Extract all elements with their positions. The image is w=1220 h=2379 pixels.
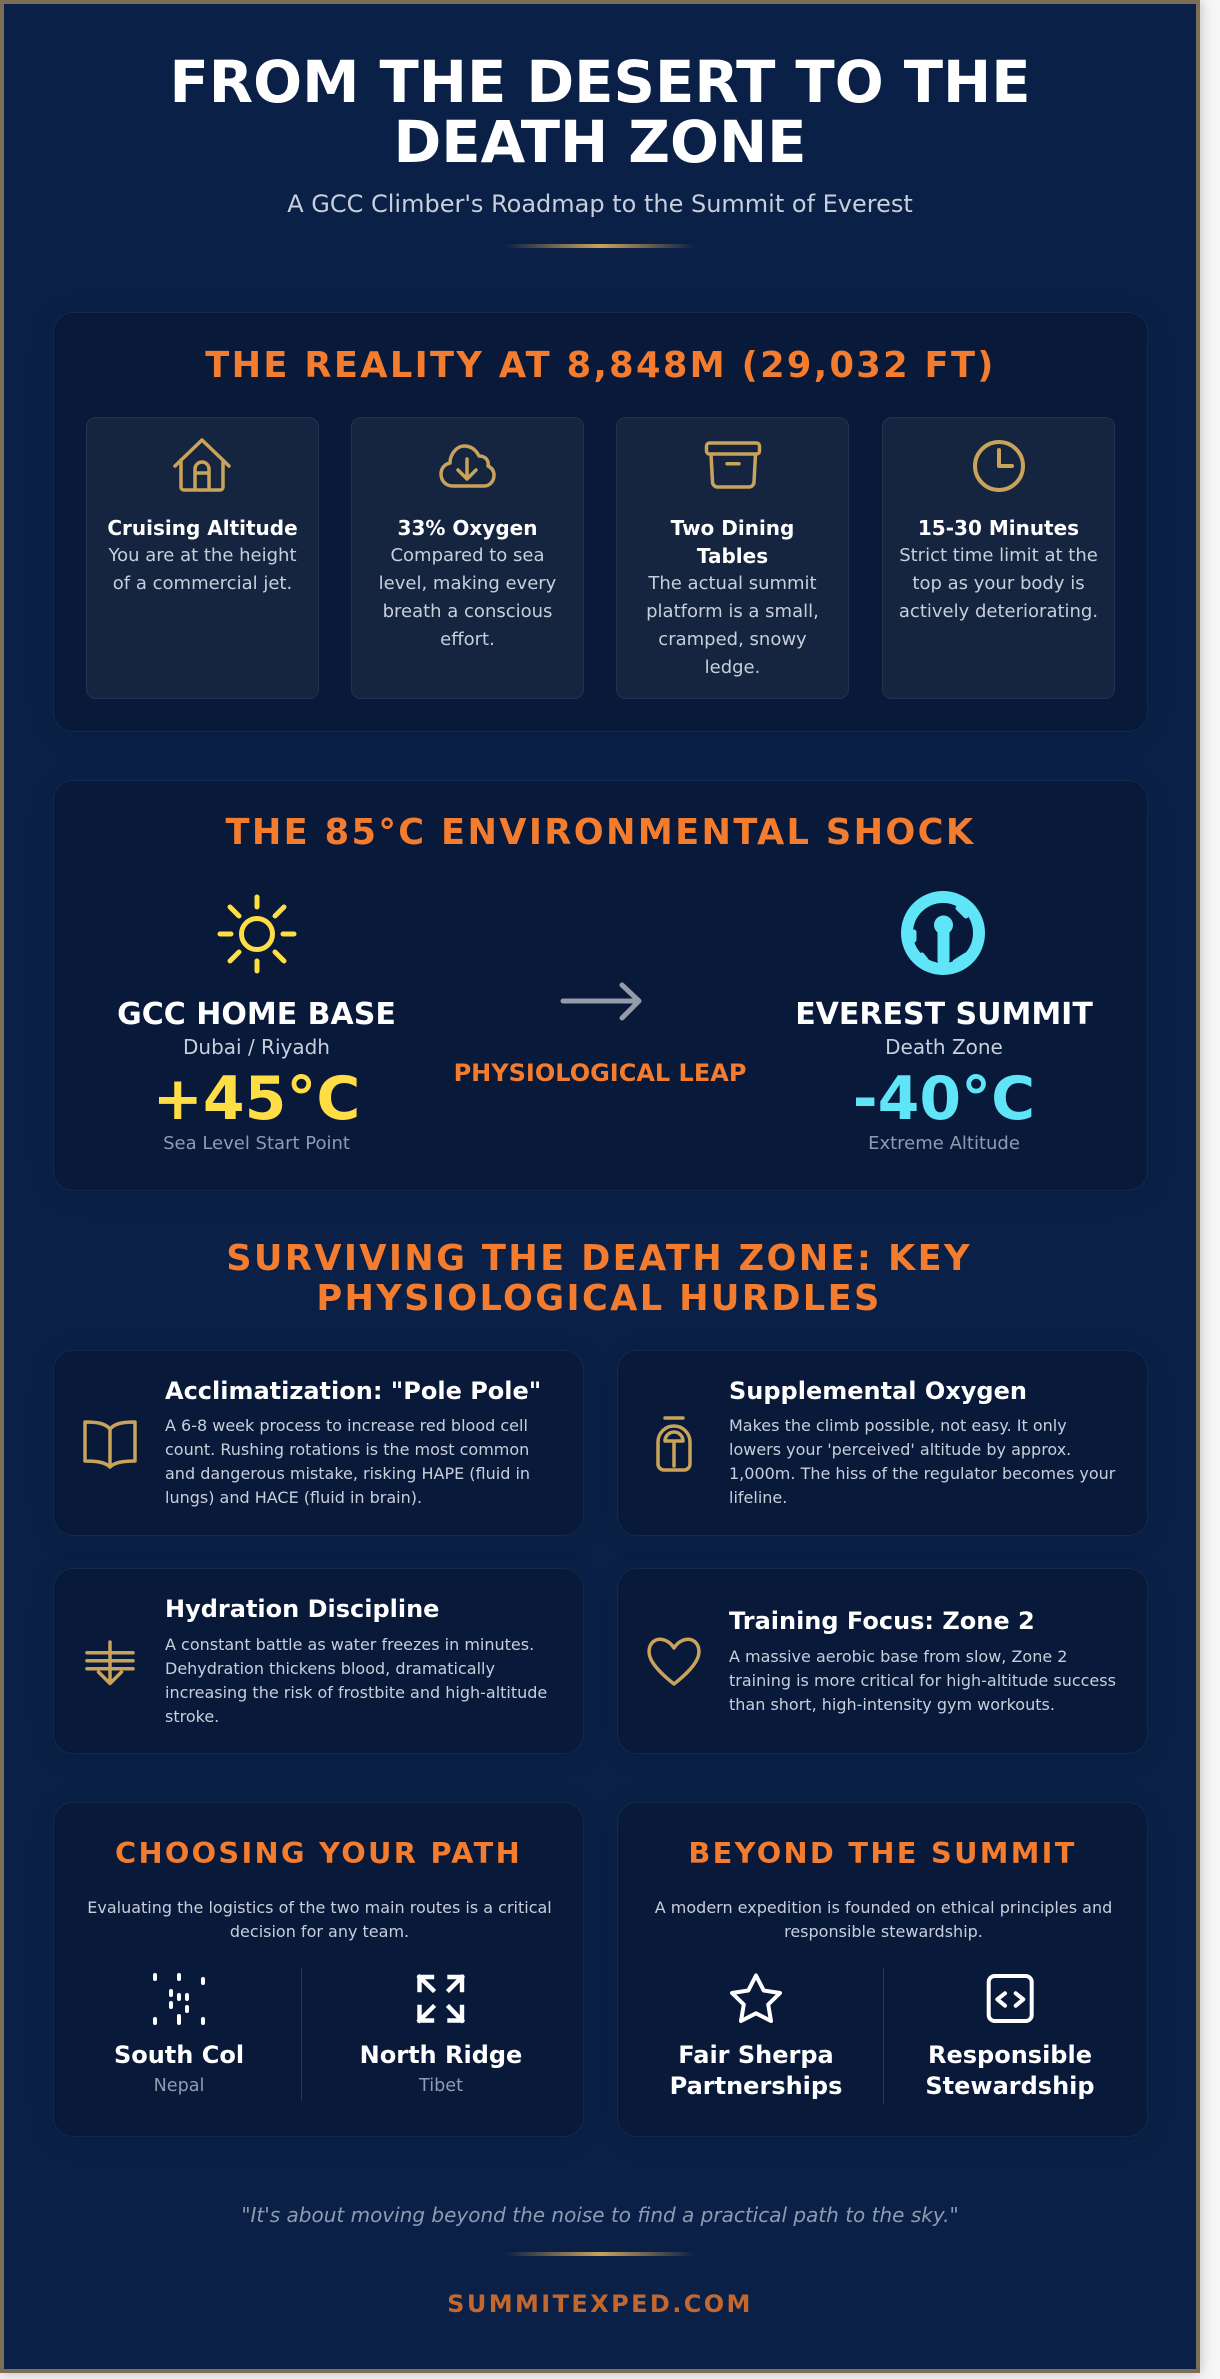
text: cruising altitude: of a commercial jet. xyxy=(113,573,292,594)
temperature: +45: +45°C xyxy=(153,1064,360,1134)
icon: house xyxy=(173,438,231,492)
title xyxy=(169,49,1031,176)
text: minutes: top as your body is xyxy=(912,573,1085,594)
label: GCC home base: GCC HOME BASE xyxy=(117,997,396,1032)
text: minutes: actively deteriorating. xyxy=(899,601,1098,622)
icon: cloud download xyxy=(439,444,496,488)
text: cruising altitude: You are at the height xyxy=(108,545,297,566)
intro: choosing your path: decision for any team. xyxy=(230,1922,409,1941)
card: supplemental oxygen xyxy=(617,1350,1148,1536)
text: oxygen: breath a conscious xyxy=(383,601,552,622)
text: cruising altitude xyxy=(107,516,298,594)
icon: heart xyxy=(647,1638,701,1686)
body: hydration: stroke. xyxy=(165,1707,219,1726)
sublabel: Dubai / Riyadh: Dubai / Riyadh xyxy=(183,1035,330,1059)
note: extreme altitude: Extreme Altitude xyxy=(868,1133,1020,1154)
label: fair sherpa partnerships: Fair Sherpa xyxy=(678,2041,834,2069)
sublabel: Tibet: Tibet xyxy=(419,2076,463,2096)
heading: beyond the summit: BEYOND THE SUMMIT xyxy=(688,1836,1077,1870)
text: minutes: 15-30 Minutes xyxy=(918,516,1079,540)
intro: beyond the summit: A modern expedition is founded on ethical principles and xyxy=(655,1898,1112,1917)
body: training: than short, high-intensity gym workouts. xyxy=(729,1695,1055,1714)
note: sea level: Sea Level Start Point xyxy=(163,1133,350,1154)
text: dining tables xyxy=(646,516,819,678)
text: dining tables: Tables xyxy=(697,544,768,568)
text: oxygen: Compared to sea xyxy=(390,545,545,566)
subtitle: A GCC Climber's Roadmap to the Summit of Everest xyxy=(287,190,913,218)
card: acclimatization xyxy=(53,1350,584,1536)
divider xyxy=(505,2252,695,2256)
label: physiological leap: PHYSIOLOGICAL LEAP xyxy=(454,1059,746,1087)
card: hydration xyxy=(53,1568,584,1754)
body: hydration: A constant battle as water freezes in minutes. xyxy=(165,1635,534,1654)
column: GCC home base xyxy=(117,894,396,1154)
body: supplemental oxygen: 1,000m. The hiss of the regulator becomes your xyxy=(729,1464,1115,1483)
heading: physiological hurdles: SURVIVING THE DEATH ZONE: KEY xyxy=(226,1238,972,1279)
sublabel: death zone: Death Zone xyxy=(885,1035,1003,1059)
icon: sun xyxy=(218,894,296,974)
text: dining tables: Two Dining xyxy=(671,516,794,540)
text: dining tables: cramped, snowy xyxy=(658,629,807,650)
body: training xyxy=(729,1647,1116,1714)
label: responsible stewardship: Responsible xyxy=(928,2041,1092,2069)
heading: shock: THE 85°C ENVIRONMENTAL SHOCK xyxy=(226,812,975,853)
text: oxygen: effort. xyxy=(440,629,495,650)
text: oxygen xyxy=(379,516,556,650)
icon: oxygen bottle xyxy=(656,1416,692,1472)
temperature: -40: -40°C xyxy=(853,1064,1035,1134)
icon: summit compass xyxy=(901,891,985,975)
icon: archive box xyxy=(704,441,762,489)
body: acclimatization: A 6-8 week process to increase red blood cell xyxy=(165,1416,528,1435)
card: cruising altitude xyxy=(86,417,319,699)
body: supplemental oxygen xyxy=(729,1416,1116,1507)
text: cruising altitude: Cruising Altitude xyxy=(107,516,298,540)
body: supplemental oxygen: lifeline. xyxy=(729,1488,787,1507)
panel: beyond the summit xyxy=(617,1802,1148,2137)
text: dining tables: ledge. xyxy=(705,657,760,678)
route: South Col xyxy=(114,1973,244,2096)
icon: book xyxy=(83,1420,137,1469)
item: responsible stewardship xyxy=(925,1974,1095,2100)
body: supplemental oxygen: lowers your 'perceived' altitude by approx. xyxy=(729,1440,1071,1459)
label: responsible stewardship xyxy=(925,2041,1095,2100)
text: dining tables: platform is a small, xyxy=(646,601,819,622)
title: training: Training Focus: Zone 2 xyxy=(729,1607,1035,1635)
card: oxygen xyxy=(351,417,584,699)
body: hydration: increasing the risk of frostbite and high-altitude xyxy=(165,1683,547,1702)
body: acclimatization xyxy=(165,1416,530,1507)
label: fair sherpa partnerships xyxy=(670,2041,842,2100)
label: responsible stewardship: Stewardship xyxy=(925,2072,1095,2100)
body: training: A massive aerobic base from slow, Zone 2 xyxy=(729,1647,1067,1666)
intro: beyond the summit: responsible stewardship. xyxy=(784,1922,983,1941)
icon: star xyxy=(730,1973,782,2024)
body: hydration xyxy=(165,1635,547,1726)
intro: choosing your path xyxy=(87,1898,552,1941)
text: oxygen: 33% Oxygen xyxy=(398,516,537,540)
heading: physiological hurdles xyxy=(226,1238,972,1319)
title: hydration: Hydration Discipline xyxy=(165,1595,439,1623)
icon: dotted grid xyxy=(153,1973,205,2025)
text: oxygen: level, making every xyxy=(379,573,556,594)
icon: hydration xyxy=(85,1640,135,1686)
sublabel: Nepal: Nepal xyxy=(154,2076,204,2096)
text: minutes: Strict time limit at the xyxy=(899,545,1098,566)
icon: code square xyxy=(986,1974,1034,2023)
label: North Ridge: North Ridge xyxy=(360,2041,522,2069)
card: minutes xyxy=(882,417,1115,699)
title: acclimatization: Acclimatization: "Pole Pole" xyxy=(165,1377,541,1405)
body: supplemental oxygen: Makes the climb possible, not easy. It only xyxy=(729,1416,1067,1435)
column: Everest summit xyxy=(795,891,1093,1154)
body: acclimatization: lungs) and HACE (fluid in brain). xyxy=(165,1488,422,1507)
label: South Col: South Col xyxy=(114,2041,244,2069)
arrow xyxy=(560,982,642,1020)
card: training xyxy=(617,1568,1148,1754)
item: fair sherpa partnerships xyxy=(670,1973,842,2100)
footer url: SUMMITEXPED.COM xyxy=(447,2290,753,2318)
icon: clock xyxy=(973,440,1025,492)
divider xyxy=(505,244,695,248)
text: dining tables: The actual summit xyxy=(648,573,817,594)
heading: reality: THE REALITY AT 8,848M (29,032 FT) xyxy=(205,345,996,386)
title: DEATH ZONE xyxy=(393,109,807,176)
heading: choosing your path: CHOOSING YOUR PATH xyxy=(115,1836,522,1870)
panel: the reality at 8,848m xyxy=(53,312,1148,732)
text: minutes xyxy=(899,516,1098,622)
icon: expand arrows xyxy=(416,1974,465,2024)
route: North Ridge xyxy=(360,1974,522,2096)
body: training: training is more critical for high-altitude success xyxy=(729,1671,1116,1690)
card: dining tables xyxy=(616,417,849,699)
intro: choosing your path: Evaluating the logistics of the two main routes is a critical xyxy=(87,1898,552,1917)
label: Everest summit: EVEREST SUMMIT xyxy=(795,997,1093,1032)
panel: environmental shock xyxy=(53,780,1148,1191)
heading: physiological hurdles: PHYSIOLOGICAL HURDLES xyxy=(316,1278,882,1319)
body: hydration: Dehydration thickens blood, dramatically xyxy=(165,1659,495,1678)
body: acclimatization: and dangerous mistake, risking HAPE (fluid in xyxy=(165,1464,530,1483)
body: acclimatization: count. Rushing rotations is the most common xyxy=(165,1440,529,1459)
intro: beyond the summit xyxy=(654,1898,1112,1941)
panel: choosing your path xyxy=(53,1802,584,2137)
label: fair sherpa partnerships: Partnerships xyxy=(670,2072,842,2100)
quote: "It's about moving beyond the noise to find a practical path to the sky." xyxy=(241,2203,959,2227)
title: supplemental oxygen: Supplemental Oxygen xyxy=(729,1377,1027,1405)
title: FROM THE DESERT TO THE xyxy=(169,49,1031,116)
